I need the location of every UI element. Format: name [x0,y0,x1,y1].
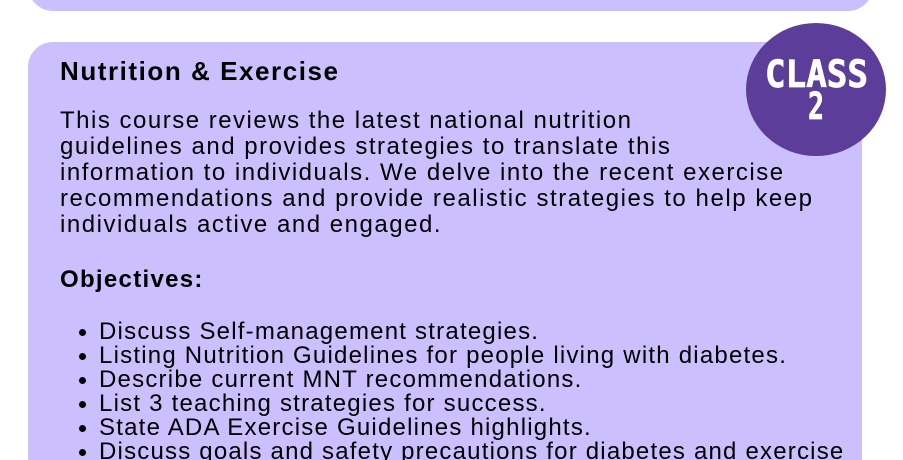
badge: Class 2: CLASS [765,53,868,96]
bullet item 4: List 3 teaching strategies for success. [99,390,547,417]
description text: individuals active and engaged. [60,211,442,238]
bullet item 2: Listing Nutrition Guidelines for people living with diabetes. [99,342,787,369]
heading: Nutrition & Exercise [60,56,340,86]
panel: previous class card [32,0,868,11]
description text: information to individuals. We delve into the recent exercise [60,159,785,186]
description text [60,107,814,238]
description text: This course reviews the latest national nutrition [60,107,632,134]
objectives list [79,320,844,460]
bullet item 3: Describe current MNT recommendations. [99,366,583,393]
badge: Class 2 [746,23,886,156]
description text: recommendations and provide realistic strategies to help keep [60,185,814,212]
description text: guidelines and provides strategies to translate this [60,133,671,160]
bullet item 5: State ADA Exercise Guidelines highlights. [99,414,592,441]
objectives heading: Objectives: [60,266,204,293]
badge: Class 2: 2 [808,85,824,128]
